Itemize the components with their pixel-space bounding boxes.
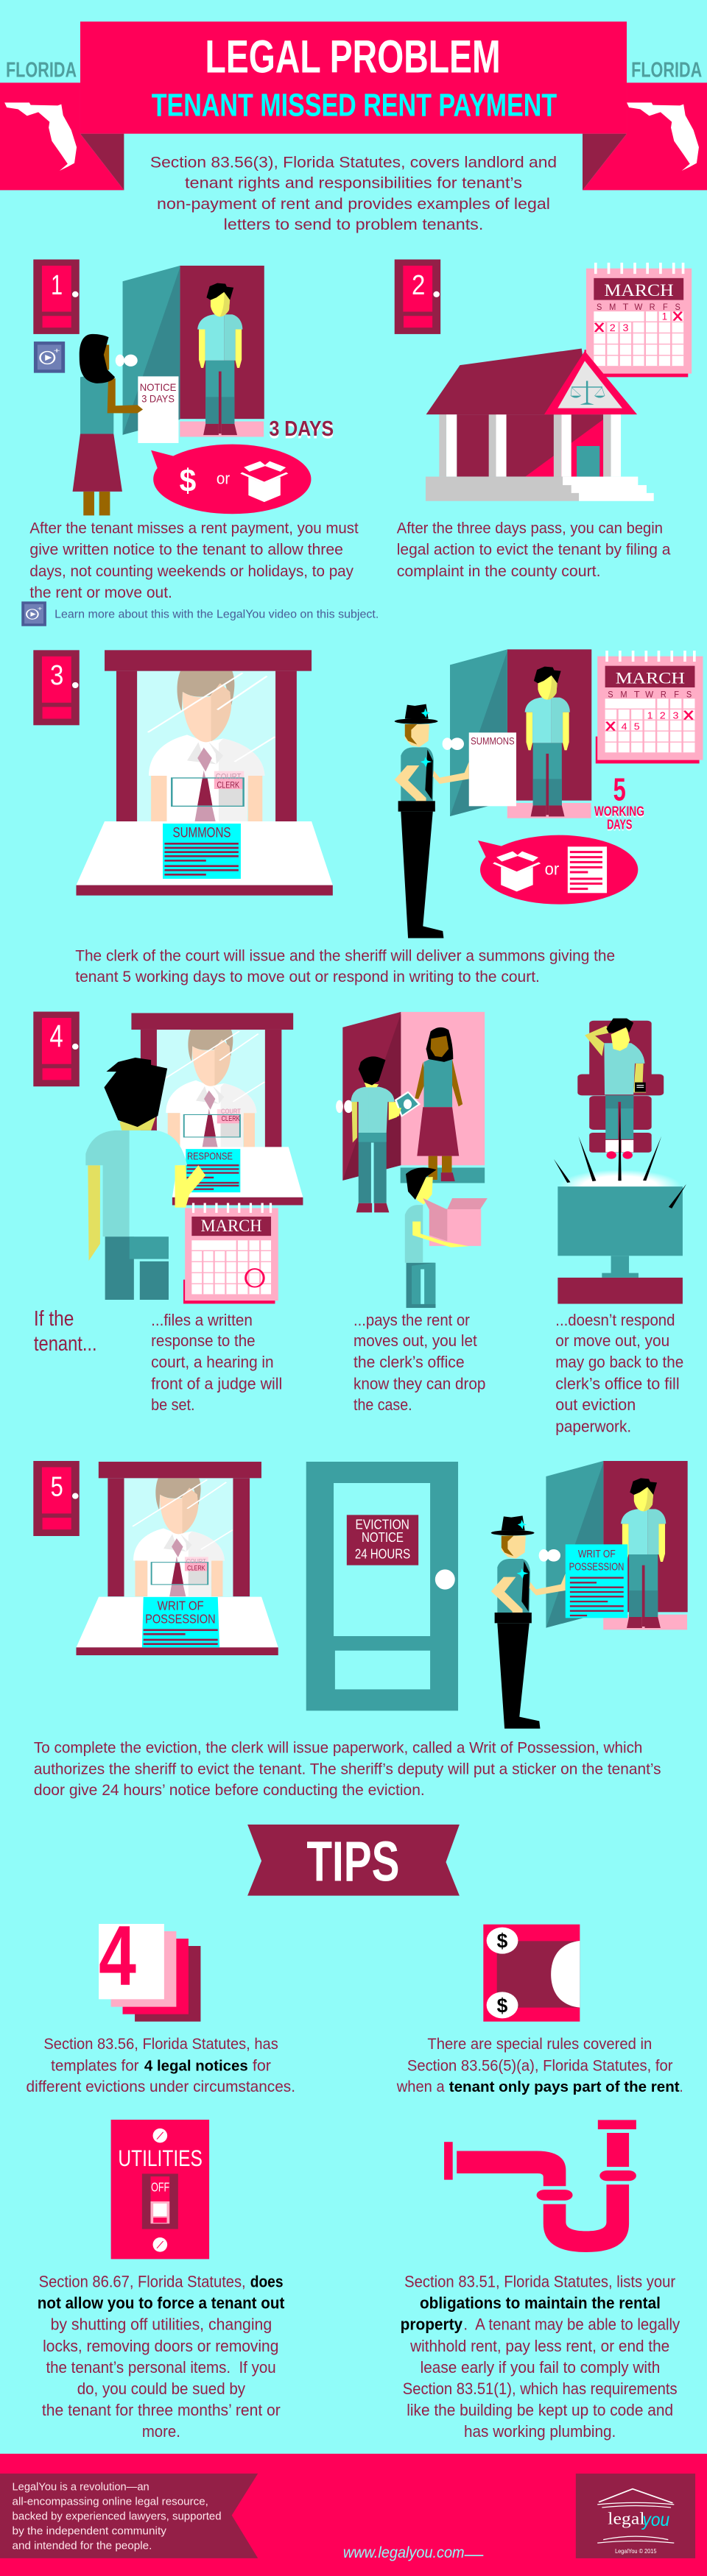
panel: step 5: POSSESSION	[569, 1560, 624, 1573]
clerk badge	[186, 1558, 206, 1571]
panel: step 4	[33, 1012, 686, 1436]
step 1 text: After the tenant misses a rent payment, you must	[29, 519, 359, 537]
tip: utilities text: do, you could be sued by	[77, 2379, 246, 2399]
infographic canvas: .	[680, 2077, 683, 2095]
tip: utilities text: does	[250, 2273, 283, 2291]
calendar: March: 1	[662, 311, 667, 322]
calendar: March: W	[634, 302, 643, 312]
callout: 5 working days: DAYS	[607, 817, 632, 832]
illustration: door with eviction notice	[306, 1462, 458, 1710]
illustration: tenant pays landlord	[336, 1012, 485, 1212]
step 5 door number: 5	[51, 1471, 63, 1502]
calendar: March: S	[686, 690, 692, 699]
illustration: tenant in doorway	[546, 1461, 688, 1630]
tip: legal notices text	[27, 2034, 295, 2095]
eviction notice sign: NOTICE	[362, 1529, 404, 1545]
text: files a response: front of a judge will	[151, 1375, 282, 1393]
icon: stack of 4 notices: 4	[99, 1908, 136, 2003]
illustration: sheriff posting writ	[491, 1515, 627, 1729]
text: files a response: ...files a written	[151, 1312, 253, 1329]
tip: legal notices text: different evictions under circumstances.	[27, 2077, 295, 2095]
calendar: hearing date: MARCH	[200, 1217, 262, 1235]
text: if the tenant: tenant...	[34, 1331, 97, 1355]
intro paragraph: letters to send to problem tenants.	[224, 215, 483, 233]
eviction notice sign	[347, 1515, 418, 1565]
tip: utilities text: the tenant’s personal items. If you	[46, 2358, 276, 2377]
tip: legal notices text: 4 legal notices	[144, 2057, 248, 2074]
tip: legal notices text: Section 83.56, Florida Statutes, has	[43, 2034, 278, 2053]
calendar: March: 2	[610, 322, 616, 333]
counter with writ of possession	[76, 1597, 278, 1655]
calendar: March: 4	[622, 721, 627, 732]
illustration: sheriff	[395, 704, 516, 938]
icon: Florida map right	[627, 102, 699, 171]
text: if the tenant: If the	[34, 1306, 74, 1330]
logo: LegalYou © 2015	[615, 2548, 656, 2555]
step 1 text: give written notice to the tenant to allow three	[29, 540, 343, 559]
panel: steps 1 and 2	[21, 260, 692, 626]
footer about ribbon: LegalYou is a revolution—an	[13, 2481, 150, 2493]
callout: 5 working days: 5	[613, 771, 626, 807]
panel: step 3: CLERK	[217, 780, 239, 790]
eviction notice sign: 24 HOURS	[355, 1546, 410, 1562]
tip: partial rent text	[396, 2034, 683, 2095]
illustration: landlord woman with notice: 3 DAYS	[141, 393, 175, 405]
video note	[21, 601, 379, 626]
eviction notice sign: EVICTION	[355, 1516, 409, 1532]
illustration: courthouse	[426, 349, 654, 501]
panel: step 3	[33, 649, 703, 986]
calendar: March: M	[609, 302, 616, 312]
illustration: tenant in doorway	[450, 649, 591, 818]
video note: Learn more about this with the LegalYou video on this subject.	[54, 607, 379, 620]
text: pays or moves out	[354, 1312, 485, 1415]
icon: partial dollar bill: $	[497, 1930, 507, 1953]
text: pays or moves out: the clerk’s office	[354, 1354, 465, 1371]
footer about ribbon: and intended for the people.	[13, 2540, 152, 2552]
calendar: March: 1	[647, 710, 653, 721]
clerk badge	[221, 1107, 241, 1122]
illustration: tenant carrying moving box	[405, 1167, 488, 1308]
calendar: March: S	[608, 690, 613, 699]
step 3 door number	[33, 650, 80, 725]
speech bubble: pay or move: or	[217, 469, 230, 488]
panel: steps 1 and 2: 3 DAYS	[270, 420, 334, 443]
panel: steps 1 and 2: 3 DAYS	[270, 417, 334, 440]
tip: maintenance text: has working plumbing.	[464, 2422, 616, 2441]
calendar: March	[596, 651, 703, 763]
text: doesn't respond: paperwork.	[555, 1418, 631, 1436]
illustration: tenant in doorway	[123, 266, 264, 437]
calendar: March: F	[663, 302, 668, 312]
text: files a response	[151, 1312, 282, 1415]
video icon	[34, 342, 65, 373]
calendar: March: 3	[672, 710, 678, 721]
tip: legal notices text: templates for	[51, 2056, 139, 2074]
text: doesn't respond	[555, 1312, 683, 1436]
logo: you	[641, 2509, 669, 2530]
step 2 door number: 2	[412, 269, 425, 300]
clerk badge	[216, 772, 242, 790]
intro paragraph	[150, 153, 557, 233]
illustration: clerk window	[99, 1462, 261, 1596]
step 3 text	[75, 946, 615, 986]
text: files a response: be set.	[151, 1396, 194, 1415]
tip: utilities text: not allow you to force a tenant out	[38, 2294, 285, 2313]
header banner	[0, 21, 707, 233]
counter with response paper	[172, 1147, 303, 1205]
speech bubble: move or respond	[478, 835, 638, 905]
step 2 door number	[395, 260, 440, 334]
clerk badge: COURT	[186, 1558, 206, 1565]
calendar: March: M	[620, 690, 627, 699]
step 1 door number	[33, 260, 80, 334]
tip: utilities text: the tenant for three months’ rent or	[42, 2401, 281, 2420]
clerk badge: COURT	[221, 1107, 241, 1115]
step 1 text: days, not counting weekends or holidays, to pay	[29, 562, 354, 580]
icon: utilities switch: UTILITIES	[118, 2145, 203, 2171]
logo	[576, 2474, 695, 2558]
text: pays or moves out: know they can drop	[354, 1375, 485, 1393]
calendar: March: W	[645, 690, 653, 699]
text: files a response: response to the	[151, 1332, 256, 1351]
icon: partial dollar bill	[483, 1925, 580, 2022]
footer about ribbon	[0, 2474, 258, 2558]
clerk badge: CLERK	[222, 1114, 240, 1122]
panel: tips	[27, 1825, 683, 2095]
website url: www.legalyou.com	[343, 2544, 465, 2561]
calendar: March: R	[661, 690, 666, 699]
calendar: March: 3	[623, 322, 628, 333]
illustration: landlord woman with notice: NOTICE	[140, 382, 176, 393]
footer about ribbon: by the independent community	[13, 2525, 166, 2538]
icon: Florida map left	[4, 102, 77, 171]
footer about ribbon: all-encompassing online legal resource,	[13, 2496, 208, 2508]
step 4 door number	[33, 1012, 80, 1086]
icon: plumbing pipe	[444, 2120, 636, 2252]
callout: 5 working days	[594, 771, 644, 834]
step 4 door number: 4	[49, 1019, 63, 1054]
text: doesn't respond: out eviction	[555, 1396, 636, 1415]
calendar: March: T	[634, 690, 640, 699]
calendar: hearing date	[183, 1203, 278, 1303]
icon: utilities switch: OFF	[151, 2180, 169, 2194]
header banner: FLORIDA	[6, 58, 77, 81]
footer	[0, 2454, 707, 2576]
tip: maintenance text: property	[401, 2315, 462, 2334]
tip: utilities text: locks, removing doors or removing	[43, 2337, 278, 2356]
step 2 text	[397, 519, 671, 580]
speech bubble: pay or move: $	[180, 462, 196, 498]
calendar: March: T	[623, 302, 629, 312]
footer about ribbon: backed by experienced lawyers, supported	[13, 2510, 222, 2523]
callout: 3 days	[270, 417, 334, 443]
speech bubble: move or respond: or	[545, 860, 559, 879]
text: pays or moves out: ...pays the rent or	[354, 1312, 470, 1329]
counter with response paper: RESPONSE	[187, 1150, 233, 1161]
illustration: clerk window	[131, 1013, 293, 1149]
panel: more tips and footer	[0, 2120, 707, 2576]
tip: legal notices text: for	[253, 2056, 271, 2074]
calendar: March: R	[650, 302, 655, 312]
text: if the tenant	[34, 1306, 97, 1355]
text: files a response: court, a hearing in	[151, 1354, 274, 1371]
icon: scales of justice	[571, 381, 605, 405]
step 5 text	[34, 1738, 661, 1799]
panel: step 5: CLERK	[187, 1564, 205, 1571]
counter with summons: SUMMONS	[172, 824, 231, 841]
calendar: March: 5	[634, 721, 640, 732]
calendar: March: S	[597, 302, 602, 312]
calendar: March: 2	[660, 710, 666, 721]
illustration: tenant ignoring, watching TV	[554, 1019, 686, 1304]
callout: 5 working days: DAYS	[607, 818, 632, 834]
tip: partial rent text: when a	[396, 2077, 445, 2095]
icon: cash	[395, 1091, 421, 1117]
panel: step 5	[33, 1461, 688, 1799]
step 1 door number: 1	[51, 269, 63, 300]
speech bubble: pay or move	[151, 445, 311, 514]
tip: maintenance text	[401, 2273, 680, 2441]
calendar: March: F	[674, 690, 679, 699]
step 5 door number	[33, 1461, 80, 1536]
icon: partial dollar bill: $	[497, 1994, 507, 2017]
step 1 text	[29, 519, 359, 601]
tips banner	[247, 1825, 460, 1896]
counter with writ of possession: POSSESSION	[145, 1613, 216, 1627]
text: pays or moves out: moves out, you let	[354, 1332, 477, 1351]
panel: step 3: COURT	[216, 772, 242, 781]
step 1 text: the rent or move out.	[29, 583, 172, 601]
illustration: tenant from behind	[85, 1058, 205, 1300]
tip: utilities text: Section 86.67, Florida Statutes,	[39, 2273, 246, 2291]
calendar: March: S	[675, 302, 680, 312]
logo: legal	[608, 2508, 645, 2528]
calendar: March	[584, 263, 692, 377]
text: pays or moves out: the case.	[354, 1396, 412, 1415]
step 3 door number: 3	[50, 659, 63, 690]
counter with summons	[76, 821, 333, 896]
counter with writ of possession: WRIT OF	[158, 1599, 204, 1613]
tip: utilities text: more.	[142, 2422, 180, 2441]
tips banner: TIPS	[306, 1830, 399, 1893]
icon: utilities switch	[111, 2120, 209, 2259]
tip: utilities text	[38, 2273, 285, 2441]
illustration: landlord woman with notice	[73, 334, 178, 515]
tip: utilities text: by shutting off utilities, changing	[51, 2315, 272, 2334]
panel: step 3: SUMMONS	[471, 735, 515, 747]
illustration: clerk window	[105, 650, 312, 821]
illustration: sheriff posting writ: WRIT OF	[578, 1547, 616, 1560]
